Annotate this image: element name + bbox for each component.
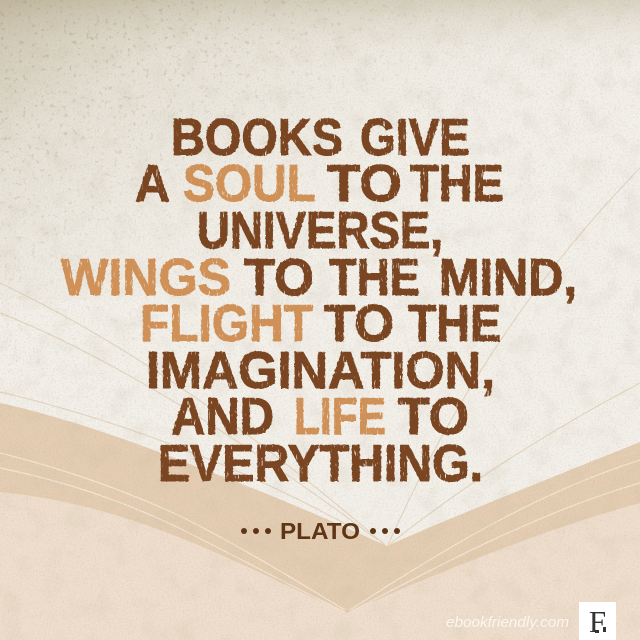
line 2: A: [135, 155, 170, 213]
open book illustration: [0, 168, 640, 640]
line 4: [61, 249, 577, 307]
watermark: ebookfriendly.com: ebookfriendly.com: [446, 614, 569, 631]
line 4: MIND,: [439, 249, 577, 307]
book cover lower area: [0, 492, 640, 640]
line 4: WINGS: [61, 249, 231, 307]
logo badge: [579, 602, 616, 640]
right dots: [370, 528, 400, 534]
line 3: UNIVERSE,: [197, 202, 443, 260]
line 5: THE: [408, 295, 501, 353]
line 2: TO: [327, 155, 402, 213]
line 4: THE: [329, 249, 420, 307]
book page edge band: [0, 403, 640, 640]
line 5: TO: [324, 295, 394, 353]
line 5: FLIGHT: [140, 295, 313, 353]
line 2: SOUL: [183, 155, 316, 213]
fanned page lines: [0, 168, 640, 545]
line 7: TO: [398, 388, 469, 446]
attribution: Plato: [241, 518, 400, 544]
line 7: LIFE: [294, 388, 386, 446]
page edge lines: [0, 453, 640, 612]
line 7: AND: [171, 388, 274, 446]
quote text: [61, 109, 577, 493]
line 8: EVERYTHING.: [158, 435, 483, 493]
line 2: [135, 155, 504, 213]
line 1: BOOKS: [171, 109, 343, 167]
logo badge: F: [589, 604, 606, 639]
line 2: THE: [410, 155, 504, 213]
line 7: [171, 388, 469, 446]
line 5: [140, 295, 501, 353]
author name: PLATO: [280, 518, 360, 544]
line 1: [171, 109, 470, 167]
left dots: [241, 528, 271, 534]
line 1: GIVE: [360, 109, 470, 167]
line 6: IMAGINATION,: [146, 342, 495, 400]
line 4: TO: [244, 249, 314, 307]
